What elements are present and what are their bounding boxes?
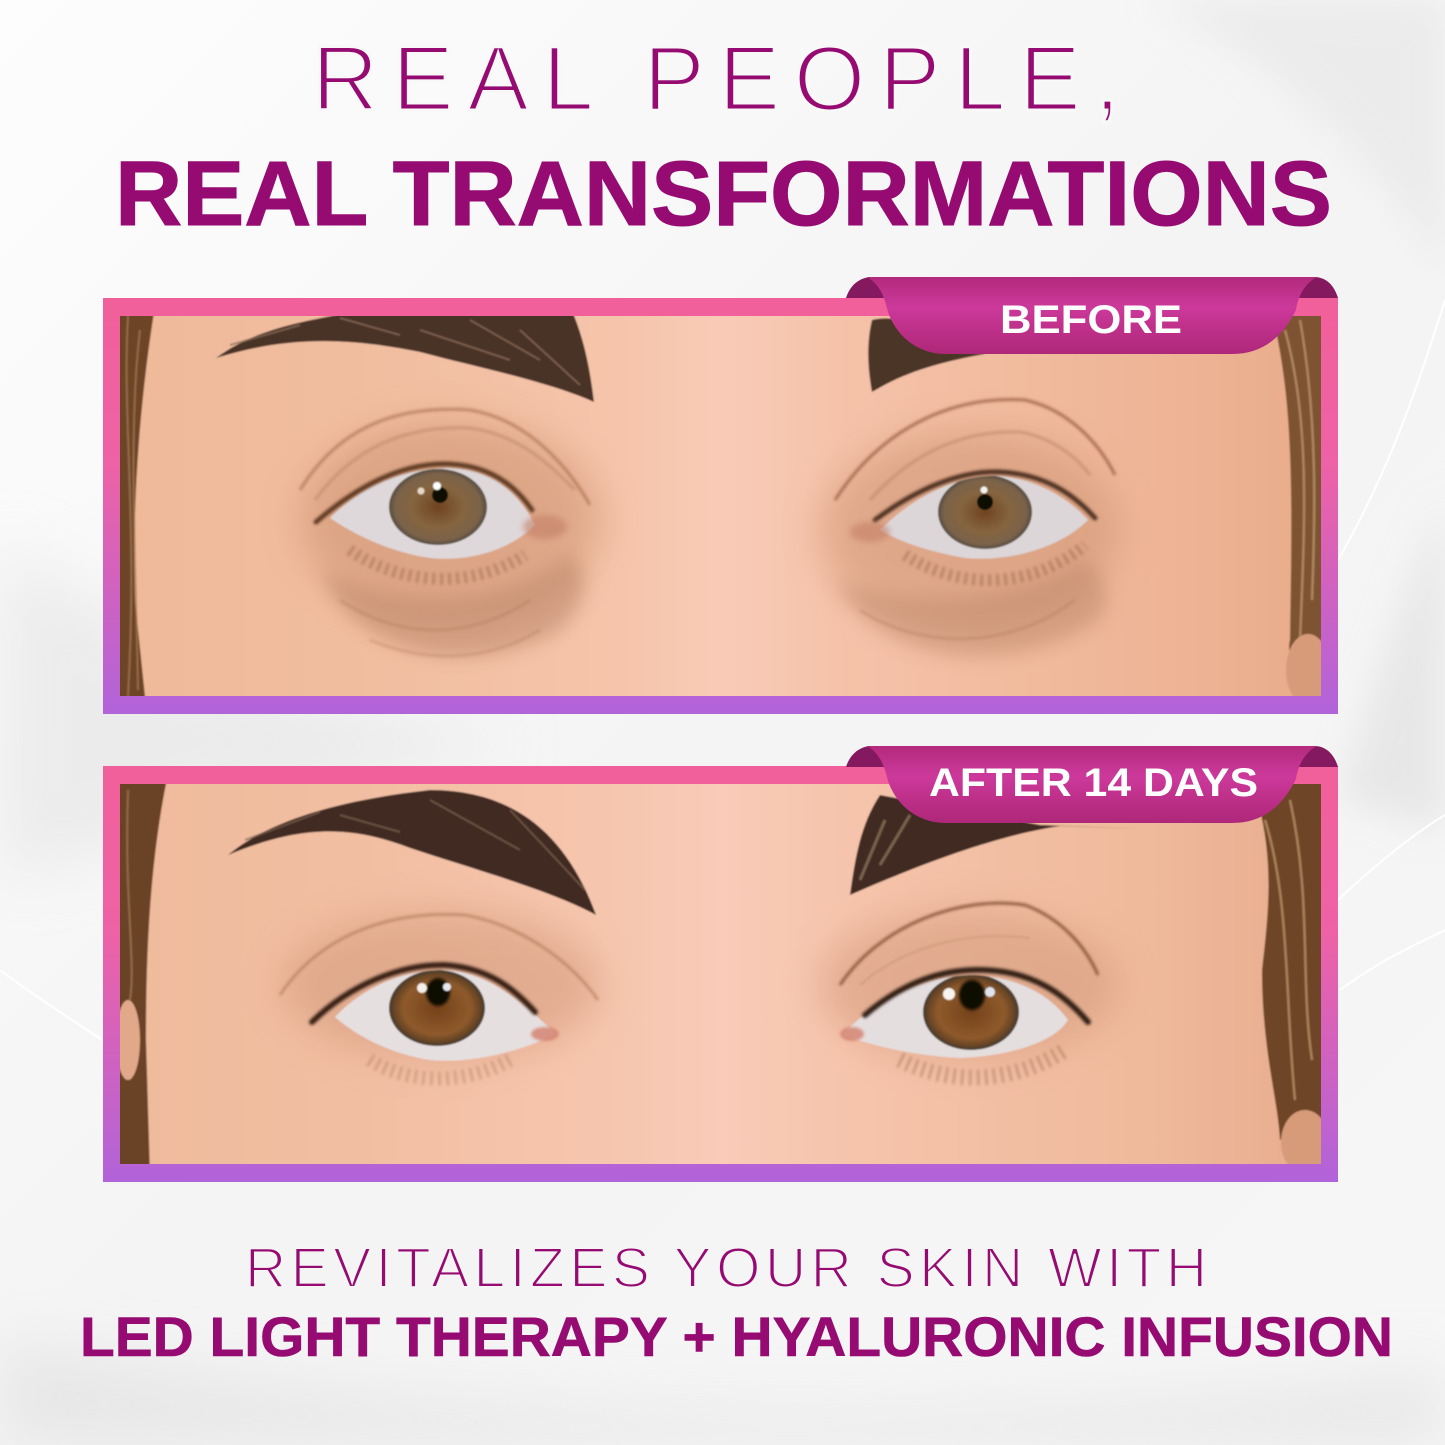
left eye — [280, 914, 598, 1079]
face: before — [100, 306, 1341, 706]
title line 1: REAL PEOPLE, — [312, 28, 1120, 130]
right eyebrow — [868, 318, 985, 392]
right eyebrow — [849, 794, 1114, 896]
title line 2: REAL TRANSFORMATIONS — [115, 143, 1332, 245]
frame — [103, 298, 1338, 714]
hair right — [1260, 784, 1321, 1140]
left eyebrow — [216, 306, 594, 402]
caption line 1: REVITALIZES YOUR SKIN WITH — [245, 1236, 1207, 1300]
caption line 2: LED LIGHT THERAPY + HYALURONIC INFUSION — [80, 1305, 1393, 1368]
left eye — [300, 409, 590, 579]
face: after 14 days — [100, 774, 1341, 1174]
frame — [103, 766, 1338, 1182]
title — [115, 28, 1332, 245]
panel: after photo — [100, 766, 1341, 1182]
ribbon: after 14 days — [846, 746, 1338, 823]
panel: before photo — [100, 298, 1341, 714]
ribbon: before — [846, 277, 1338, 354]
hair left — [120, 784, 167, 1164]
hair left — [120, 316, 154, 696]
left eyebrow — [228, 790, 596, 915]
right eye — [835, 400, 1115, 580]
hair right — [1276, 316, 1321, 650]
label: AFTER 14 DAYS — [929, 761, 1258, 805]
bottom caption — [80, 1236, 1393, 1368]
label: BEFORE — [1000, 298, 1182, 342]
right eye — [840, 903, 1098, 1078]
